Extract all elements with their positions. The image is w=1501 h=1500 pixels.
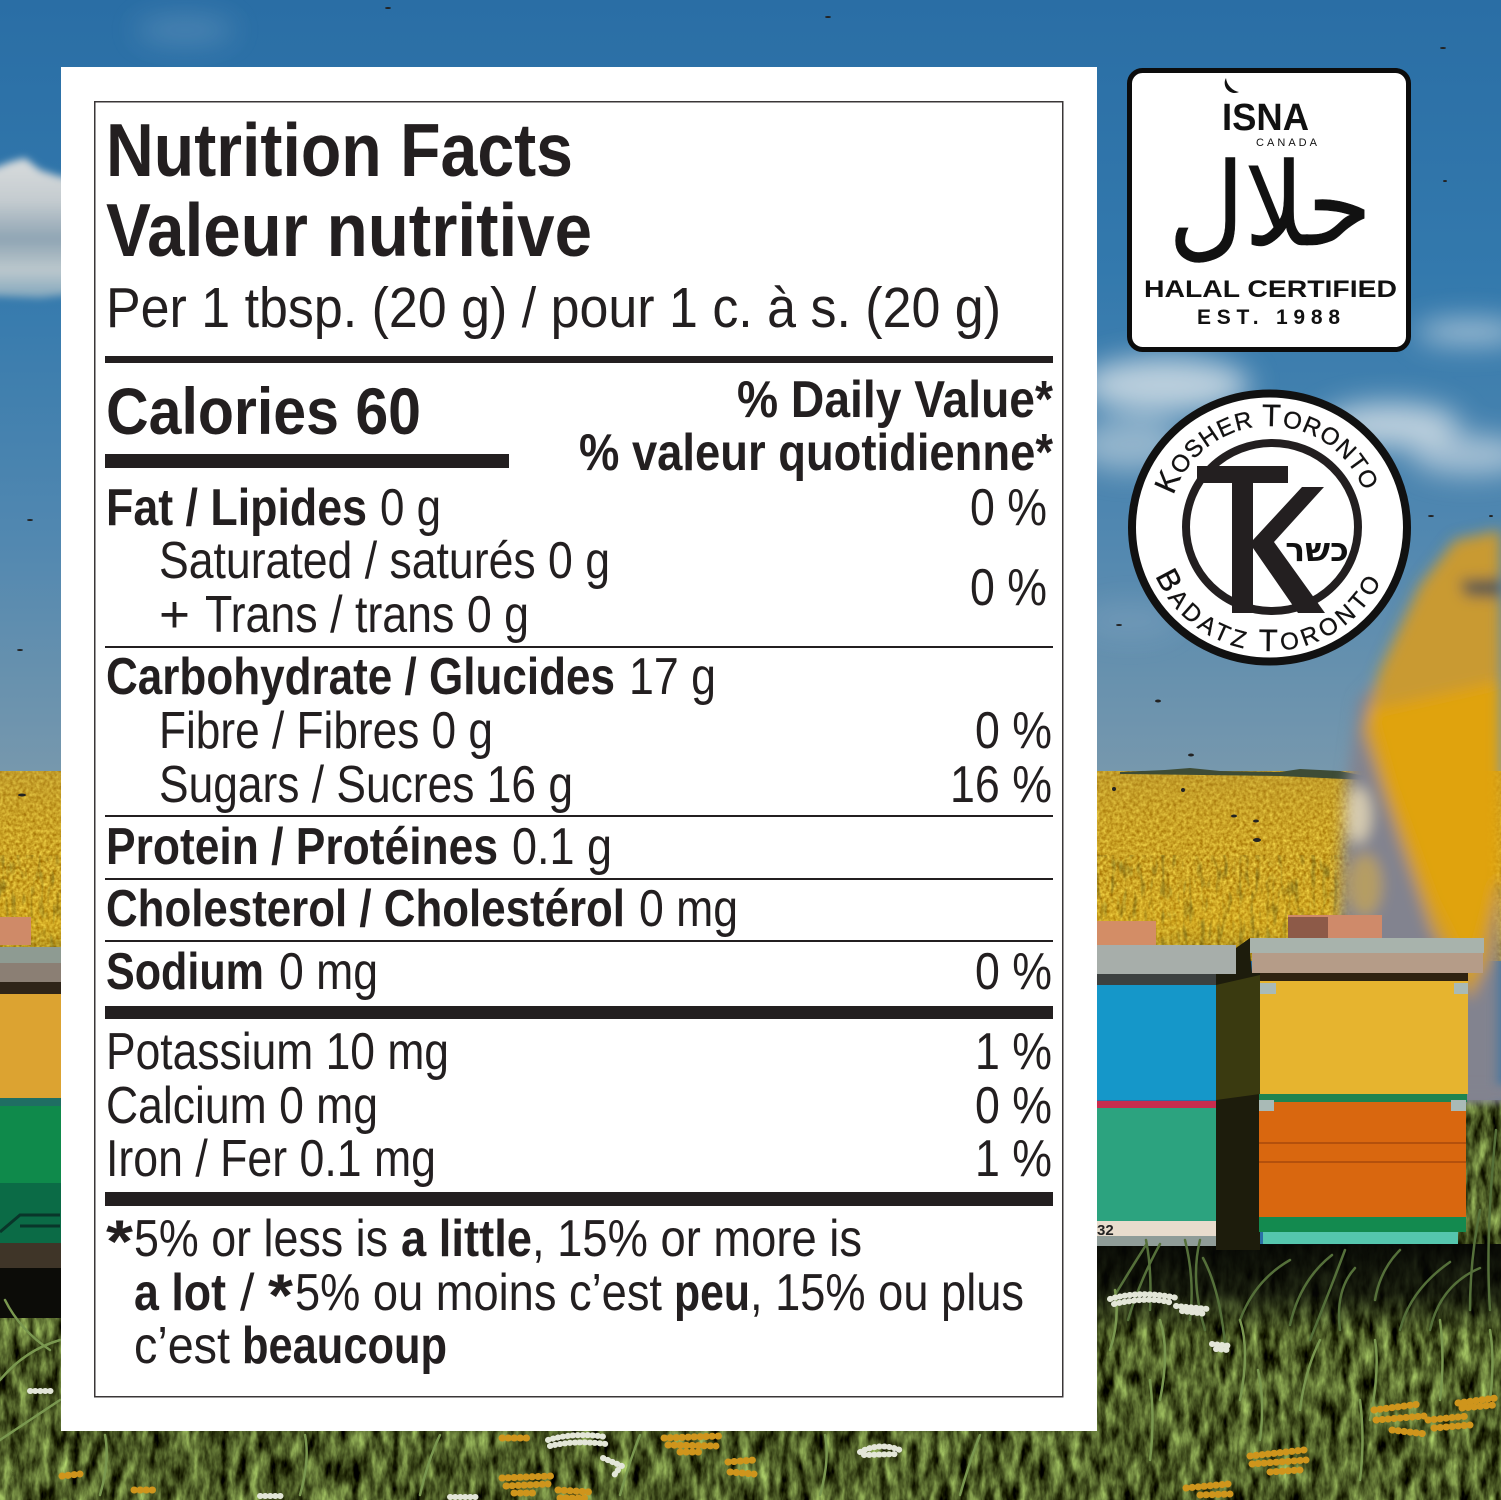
- blue and teal hive: 32: [1097, 1222, 1114, 1239]
- row: fibre: 0 %: [975, 702, 1052, 760]
- row: carbohydrate: 17 g: [629, 648, 716, 706]
- row: sodium: [106, 943, 1052, 1001]
- blurred foreground hive: [1340, 530, 1501, 1110]
- Canada label: CANADA: [1256, 137, 1318, 149]
- calories: Calories 60: [106, 374, 421, 448]
- footnote: , 15% ou plus: [750, 1264, 1024, 1322]
- bees: [17, 7, 1493, 842]
- daily value heading: % Daily Value*: [737, 371, 1054, 429]
- footnote: peu: [674, 1264, 750, 1322]
- row: protein: 0.1 g: [512, 818, 612, 876]
- row: calcium: [106, 1077, 1052, 1135]
- row: saturated and trans: Trans / trans 0 g: [205, 586, 529, 644]
- row: protein: Protein / Protéines: [106, 818, 498, 876]
- soft edge of blurred hive over grass: [1390, 1085, 1501, 1103]
- row: potassium: [106, 1023, 1052, 1081]
- row: sodium: 0 %: [975, 943, 1052, 1001]
- shadow under right hives: [1097, 1244, 1501, 1334]
- row: fat: [106, 479, 1047, 537]
- field stems: [0, 855, 1501, 950]
- white flowers: [30, 1294, 1231, 1497]
- brick on right hive: [1288, 915, 1382, 938]
- footnote: *: [268, 1262, 294, 1329]
- row: fibre: [159, 702, 1052, 760]
- daily value heading: % valeur quotidienne*: [579, 424, 1054, 482]
- row: saturated and trans: 0 %: [970, 559, 1047, 617]
- row: calcium: Calcium 0 mg: [106, 1077, 378, 1135]
- row: cholesterol: 0 mg: [639, 880, 738, 938]
- row: sugars: [159, 756, 1052, 814]
- bottom curved text: BADATZ TORONTO: [1156, 568, 1378, 652]
- row: sodium: Sodium: [106, 943, 264, 1001]
- row: saturated and trans: +: [159, 586, 190, 644]
- daily value heading: [579, 371, 1054, 482]
- grass blades: [0, 1130, 1496, 1495]
- row: sodium: 0 mg: [279, 943, 378, 1001]
- inner ring: [1186, 443, 1358, 611]
- row: iron: 1 %: [975, 1130, 1052, 1188]
- footnote: *: [106, 1208, 134, 1275]
- badge: ISNA halal certified: [1130, 70, 1408, 350]
- row: cholesterol: Cholesterol / Cholestérol: [106, 880, 625, 938]
- row: iron: [106, 1130, 1052, 1188]
- row: saturated and trans: [159, 532, 1047, 644]
- row: calcium: 0 %: [975, 1077, 1052, 1135]
- row: sugars: 16 %: [950, 756, 1052, 814]
- distant tree line: [1120, 768, 1365, 780]
- top curved text: KOSHER TORONTO: [1154, 404, 1376, 494]
- yellow and orange hive: [1250, 915, 1484, 1244]
- title: Valeur nutritive: [106, 188, 592, 272]
- icon: crescent: [1225, 78, 1239, 93]
- footnote: 5% or less is: [134, 1210, 388, 1268]
- flower field: [0, 771, 1501, 961]
- brick on middle hive: [1097, 921, 1156, 945]
- footnote: [106, 1208, 1024, 1375]
- Hebrew word kosher: כשר: [1285, 530, 1349, 569]
- row: iron: Iron / Fer 0.1 mg: [106, 1130, 436, 1188]
- row: sugars: Sugars / Sucres 16 g: [159, 756, 573, 814]
- left hive: [0, 917, 61, 1318]
- established label: EST. 1988: [1197, 306, 1340, 329]
- calories: [105, 374, 509, 468]
- footnote: a little: [401, 1210, 532, 1268]
- halal certified label: HALAL CERTIFIED: [1144, 276, 1397, 303]
- footnote: c’est: [134, 1317, 230, 1375]
- Arabic word halal: حلال: [1168, 138, 1372, 272]
- footnote: 5% ou moins c’est: [295, 1264, 662, 1322]
- title: [106, 108, 592, 272]
- panel: nutrition facts card: [61, 67, 1097, 1431]
- footnote: a lot: [134, 1264, 226, 1322]
- row: fat: 0 %: [970, 479, 1047, 537]
- grass: [0, 1100, 1501, 1500]
- footnote: beaucoup: [242, 1317, 447, 1375]
- brick on left hive: [0, 917, 31, 945]
- row: potassium: 1 %: [975, 1023, 1052, 1081]
- footnote: , 15% or more is: [532, 1210, 862, 1268]
- ISNA wordmark: ISNA: [1222, 97, 1309, 139]
- row: fat: 0 g: [380, 479, 441, 537]
- yellow wild flowers: [62, 1398, 1496, 1498]
- left cloud: [0, 158, 90, 298]
- row: saturated and trans: Saturated / saturés 0 g: [159, 532, 610, 590]
- footnote: /: [240, 1264, 255, 1322]
- clouds: [135, 16, 1501, 638]
- TK monogram: [1197, 466, 1325, 613]
- row: fat: Fat / Lipides: [106, 479, 367, 537]
- sky: [0, 0, 1501, 775]
- badge: Kosher Toronto: [1128, 390, 1411, 666]
- blue and teal hive: [1097, 921, 1260, 1250]
- title: Nutrition Facts: [106, 108, 573, 192]
- serving size: Per 1 tbsp. (20 g) / pour 1 c. à s. (20 g): [106, 276, 1001, 340]
- row: carbohydrate: Carbohydrate / Glucides: [106, 648, 615, 706]
- row: potassium: Potassium 10 mg: [106, 1023, 449, 1081]
- row: fibre: Fibre / Fibres 0 g: [159, 702, 493, 760]
